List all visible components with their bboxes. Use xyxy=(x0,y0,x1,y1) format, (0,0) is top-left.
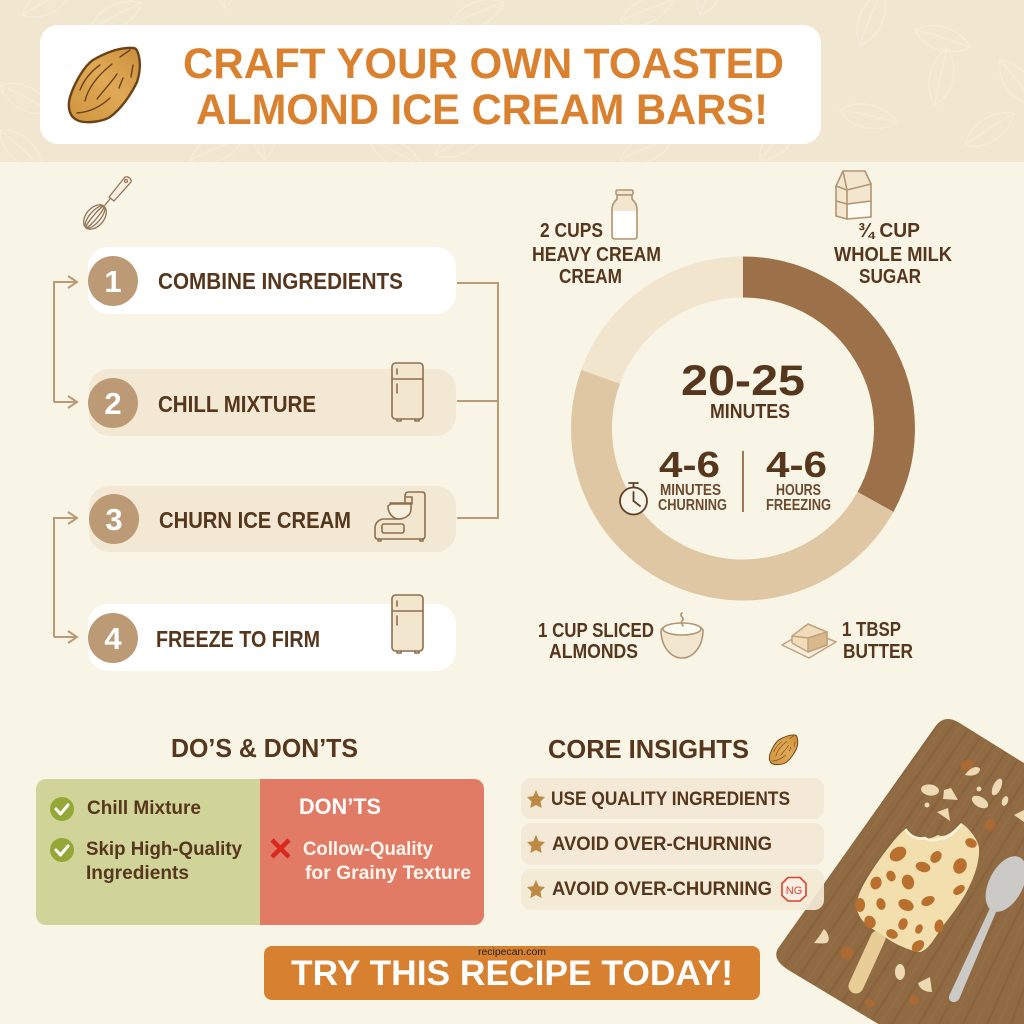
donut centre: freezing time: HOURS xyxy=(776,482,821,499)
panel: do's and don'ts xyxy=(36,779,484,925)
don'ts list: DON’TS xyxy=(299,794,381,819)
almond chips xyxy=(814,767,1024,992)
ingredient: sliced almonds xyxy=(538,613,703,663)
step 3: CHURN ICE CREAM xyxy=(159,507,351,533)
donut centre: freezing time: FREEZING xyxy=(766,497,831,514)
ingredient: whole milk and sugar: WHOLE MILK xyxy=(834,244,953,266)
step 4: FREEZE TO FIRM xyxy=(156,626,320,652)
wooden board xyxy=(776,719,1024,1024)
step 3 xyxy=(89,486,456,552)
ice cream bar xyxy=(855,823,979,954)
icon: almond xyxy=(69,48,140,122)
ingredient: whole milk and sugar xyxy=(834,171,953,288)
icon: fridge xyxy=(392,595,423,653)
ingredient: whole milk and sugar: ¾ CUP xyxy=(858,220,920,242)
ingredient: heavy cream: CREAM xyxy=(559,266,622,288)
don'ts list: for Grainy Texture xyxy=(305,863,471,884)
ingredient: butter xyxy=(782,619,913,663)
process connectors xyxy=(54,276,498,643)
title xyxy=(183,40,784,134)
donut centre: churning time: 4-6 xyxy=(659,444,720,485)
header band with leaf pattern xyxy=(0,0,1024,180)
ingredient: whole milk and sugar: SUGAR xyxy=(859,266,921,288)
do's list xyxy=(50,797,242,884)
title card xyxy=(40,25,821,144)
step 2 xyxy=(88,363,456,436)
donut centre: freezing time xyxy=(766,444,831,514)
icon: stand mixer xyxy=(375,492,425,541)
icon: small almond xyxy=(769,735,798,765)
panel: core insights list xyxy=(521,778,824,910)
insight 2: AVOID OVER-CHURNING xyxy=(552,834,772,855)
insight 3: AVOID OVER-CHURNING xyxy=(552,879,772,900)
don'ts list: Collow-Quality xyxy=(303,839,433,860)
insight 1 xyxy=(521,778,824,819)
donut centre: churning time: MINUTES xyxy=(660,482,721,499)
icon: warning octagon: NG xyxy=(786,885,802,897)
title: CRAFT YOUR OWN TOASTED xyxy=(183,40,784,88)
icon: butter dish xyxy=(782,624,836,658)
spoon xyxy=(949,850,1024,1002)
title: ALMOND ICE CREAM BARS! xyxy=(196,86,768,134)
step 1 xyxy=(88,247,456,314)
step 1: COMBINE INGREDIENTS xyxy=(158,268,403,294)
step 1: 1 xyxy=(104,264,122,299)
donut centre: churning time: CHURNING xyxy=(658,497,727,514)
source watermark: recipecan.com xyxy=(478,947,546,958)
toasted crumbs xyxy=(840,757,996,1008)
ingredient: butter: BUTTER xyxy=(843,641,913,663)
insight 3 xyxy=(521,869,824,910)
donut centre: churning time xyxy=(658,444,727,514)
ingredient: butter: 1 TBSP xyxy=(842,619,901,641)
insight 2 xyxy=(521,823,824,865)
heading: do's and don'ts: DO’S & DON’TS xyxy=(171,733,358,763)
divider xyxy=(742,451,744,512)
donut centre: freezing time: 4-6 xyxy=(766,444,827,485)
step 3: 3 xyxy=(105,502,123,537)
ingredient: sliced almonds: ALMONDS xyxy=(549,641,638,663)
ingredient: sliced almonds: 1 CUP SLICED xyxy=(538,620,654,642)
donut chart xyxy=(591,277,894,580)
icon: whisk xyxy=(79,177,131,234)
icon: bottle xyxy=(612,190,637,239)
do's list: Ingredients xyxy=(86,863,189,884)
icon: milk carton xyxy=(836,171,871,219)
icon: fridge xyxy=(392,363,423,421)
icon: stopwatch xyxy=(620,483,647,514)
step 2: CHILL MIXTURE xyxy=(158,391,316,417)
ingredient: heavy cream: 2 CUPS xyxy=(540,220,603,242)
ingredient: heavy cream: HEAVY CREAM xyxy=(532,244,661,266)
heading: core insights: CORE INSIGHTS xyxy=(548,734,749,764)
step 2: 2 xyxy=(104,386,122,421)
do's list: Skip High-Quality xyxy=(86,839,242,860)
call to action button xyxy=(264,946,760,1000)
donut centre: total time: MINUTES xyxy=(710,401,790,423)
illustration: cutting board with ice cream bar xyxy=(776,719,1024,1024)
call to action button: TRY THIS RECIPE TODAY! xyxy=(291,954,733,993)
don'ts list xyxy=(272,794,471,884)
donut centre: total time: 20-25 xyxy=(681,357,805,405)
donut centre: total time xyxy=(681,357,805,423)
icon: warning octagon xyxy=(782,878,806,901)
ice cream stick xyxy=(856,938,878,986)
do's list: Chill Mixture xyxy=(87,798,201,819)
ingredient: heavy cream xyxy=(532,190,661,288)
icon: bowl xyxy=(661,613,703,658)
step 4 xyxy=(88,595,456,671)
step 4: 4 xyxy=(104,621,122,656)
insight 1: USE QUALITY INGREDIENTS xyxy=(551,789,790,810)
